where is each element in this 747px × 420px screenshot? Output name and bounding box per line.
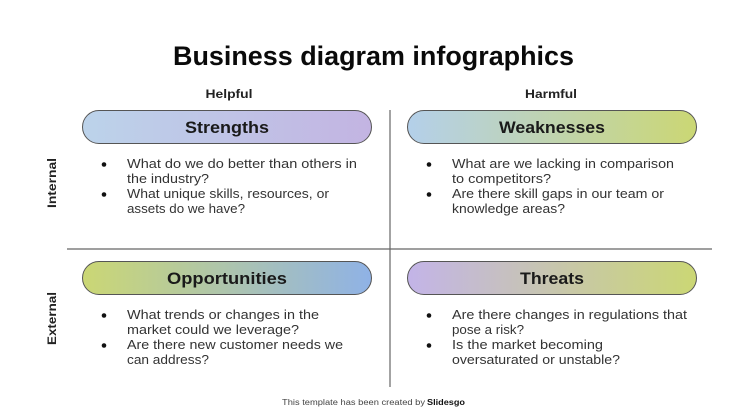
opportunities bullet list <box>102 307 343 367</box>
opportunities bullet list: market could we leverage? <box>127 322 299 337</box>
strengths heading: Strengths <box>185 118 269 137</box>
row label: external: External <box>45 292 59 345</box>
weaknesses pill <box>408 110 696 144</box>
weaknesses bullet list: Are there skill gaps in our team or <box>452 186 665 201</box>
panel: opportunities <box>82 262 372 367</box>
opportunities bullet list: What trends or changes in the <box>127 307 319 322</box>
title: Business diagram infographics <box>173 41 574 71</box>
panel: weaknesses <box>408 110 696 216</box>
weaknesses bullet list <box>427 156 674 216</box>
strengths pill <box>82 110 372 144</box>
opportunities bullet list: can address? <box>127 352 209 367</box>
panel: threats <box>408 262 696 367</box>
weaknesses heading: Weaknesses <box>499 118 605 137</box>
strengths bullet list: What unique skills, resources, or <box>127 186 330 201</box>
threats bullet list: oversaturated or unstable? <box>452 352 620 367</box>
strengths bullet list: assets do we have? <box>127 201 245 216</box>
row label: internal: Internal <box>45 158 59 208</box>
threats bullet list: Is the market becoming <box>452 337 603 352</box>
horizontal axis line <box>67 248 712 250</box>
vertical axis line <box>389 110 391 387</box>
opportunities pill <box>82 262 372 294</box>
column heading: helpful: Helpful <box>206 87 252 101</box>
threats heading: Threats <box>520 269 584 288</box>
footer credit: This template has been created by <box>282 398 425 407</box>
footer credit: Slidesgo <box>427 398 465 407</box>
strengths bullet list <box>102 156 357 216</box>
strengths bullet list: the industry? <box>127 171 209 186</box>
footer credit <box>282 398 465 407</box>
weaknesses bullet list: knowledge areas? <box>452 201 565 216</box>
opportunities heading: Opportunities <box>167 269 287 288</box>
weaknesses bullet list: to competitors? <box>452 171 551 186</box>
threats bullet list: Are there changes in regulations that <box>452 307 687 322</box>
opportunities bullet list: Are there new customer needs we <box>127 337 343 352</box>
strengths bullet list: What do we do better than others in <box>127 156 357 171</box>
weaknesses bullet list: What are we lacking in comparison <box>452 156 674 171</box>
threats pill <box>408 262 696 294</box>
threats bullet list: pose a risk? <box>452 322 524 337</box>
threats bullet list <box>427 307 687 367</box>
panel: strengths <box>82 110 372 216</box>
column heading: harmful: Harmful <box>525 87 577 101</box>
